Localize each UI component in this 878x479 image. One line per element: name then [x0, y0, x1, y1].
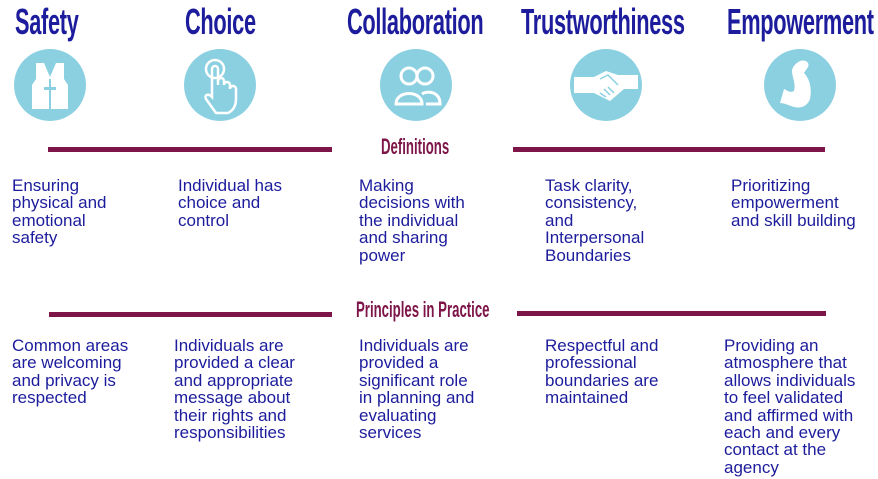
text: Empowerment practice: agency — [724, 458, 779, 477]
text: Choice practice: message about — [174, 388, 290, 407]
text: Trustworthiness definition: Boundaries — [545, 246, 631, 265]
text: Trustworthiness practice: professional — [545, 353, 637, 372]
text: Safety practice: respected — [12, 388, 87, 407]
text: Trustworthiness practice: boundaries are — [545, 371, 658, 390]
text: Choice practice: Individuals are — [174, 336, 284, 355]
text: Trustworthiness practice — [545, 336, 658, 407]
text: Safety definition: safety — [12, 228, 57, 247]
text: Trustworthiness definition: consistency, — [545, 193, 637, 212]
heading: Empowerment: Empowerment — [727, 1, 874, 42]
text: Empowerment definition: and skill building — [731, 211, 856, 230]
text: Safety definition — [12, 176, 107, 247]
text: Collaboration practice: Individuals are — [359, 336, 469, 355]
text: Collaboration definition: decisions with — [359, 193, 465, 212]
text: Safety practice: Common areas — [12, 336, 128, 355]
text: Safety practice — [12, 336, 128, 407]
text: Empowerment definition — [731, 176, 856, 230]
text: Collaboration practice: evaluating — [359, 406, 437, 425]
icon: people — [380, 49, 452, 121]
text: Choice practice: and appropriate — [174, 371, 293, 390]
text: Choice practice — [174, 336, 295, 442]
text: Trustworthiness practice: Respectful and — [545, 336, 658, 355]
heading: Choice: Choice — [185, 1, 256, 42]
divider line left (definitions) — [48, 147, 332, 152]
text: Trustworthiness definition: Task clarity, — [545, 176, 633, 195]
text: Empowerment practice: allows individuals — [724, 371, 855, 390]
text: Choice definition: choice and — [178, 193, 260, 212]
text: Collaboration practice — [359, 336, 474, 442]
heading: Collaboration: Collaboration — [347, 1, 483, 42]
text: Empowerment practice: to feel validated — [724, 388, 843, 407]
text: Trustworthiness definition — [545, 176, 644, 265]
text: Safety practice: and privacy is — [12, 371, 116, 390]
text: Collaboration definition: Making — [359, 176, 414, 195]
icon: life vest — [14, 49, 86, 121]
text: Choice practice: responsibilities — [174, 423, 286, 442]
text: Choice definition: Individual has — [178, 176, 282, 195]
text: Collaboration definition — [359, 176, 465, 265]
text: Choice definition — [178, 176, 282, 230]
text: Choice practice: their rights and — [174, 406, 286, 425]
heading: Trustworthiness: Trustworthiness — [521, 1, 685, 42]
text: Choice definition: control — [178, 211, 229, 230]
text: Safety definition: Ensuring — [12, 176, 79, 195]
heading: Safety: Safety — [15, 1, 79, 42]
text: Empowerment practice: contact at the — [724, 440, 826, 459]
text: Choice practice: provided a clear — [174, 353, 295, 372]
text: Empowerment practice: atmosphere that — [724, 353, 847, 372]
divider line right (definitions) — [513, 147, 825, 152]
text: Safety definition: emotional — [12, 211, 86, 230]
icon: handshake — [570, 49, 642, 121]
text: Trustworthiness definition: Interpersonal — [545, 228, 644, 247]
text: Empowerment practice: and affirmed with — [724, 406, 853, 425]
icon: pointing hand — [184, 49, 256, 121]
divider line left (practice) — [49, 312, 332, 317]
text: Empowerment definition: empowerment — [731, 193, 839, 212]
text: Collaboration practice: significant role — [359, 371, 468, 390]
subheading: Principles in Practice: Principles in Practice — [356, 297, 490, 322]
text: Safety practice: are welcoming — [12, 353, 122, 372]
text: Collaboration practice: in planning and — [359, 388, 474, 407]
text: Empowerment practice — [724, 336, 855, 477]
text: Safety definition: physical and — [12, 193, 107, 212]
text: Empowerment practice: each and every — [724, 423, 840, 442]
divider line right (practice) — [517, 311, 826, 316]
text: Collaboration definition: power — [359, 246, 405, 265]
text: Trustworthiness practice: maintained — [545, 388, 628, 407]
text: Empowerment practice: Providing an — [724, 336, 819, 355]
text: Collaboration definition: and sharing — [359, 228, 448, 247]
text: Collaboration definition: the individual — [359, 211, 458, 230]
icon: flexed arm — [764, 49, 836, 121]
text: Empowerment definition: Prioritizing — [731, 176, 810, 195]
text: Collaboration practice: provided a — [359, 353, 438, 372]
subheading: Definitions: Definitions — [381, 134, 449, 159]
text: Trustworthiness definition: and — [545, 211, 573, 230]
text: Collaboration practice: services — [359, 423, 421, 442]
